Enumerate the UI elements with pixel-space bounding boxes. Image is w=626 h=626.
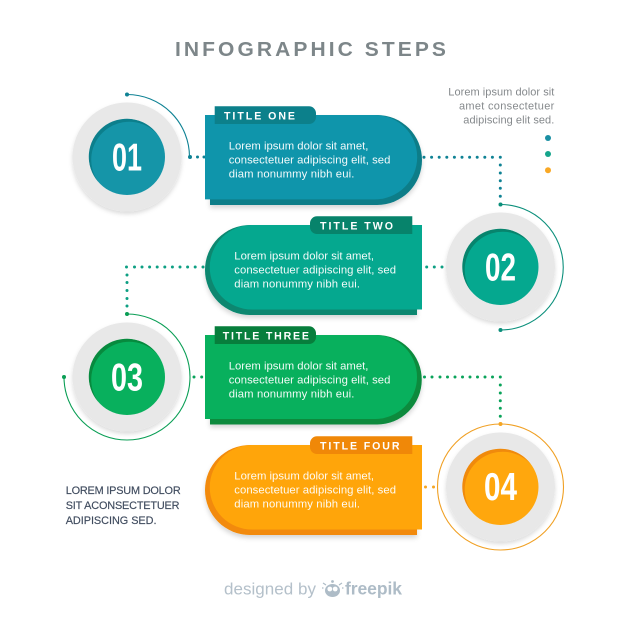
legend dots: [545, 135, 551, 173]
arc 1: [125, 92, 190, 157]
title tab two: [310, 216, 412, 234]
text block: bottom left note: [66, 485, 181, 527]
title tab one: [215, 106, 316, 124]
body text one: consectetuer adipiscing elit, sed: [229, 155, 390, 167]
circle badge 01: [72, 102, 182, 212]
circle badge 04: 04: [484, 466, 517, 509]
title tab four: [310, 436, 412, 454]
panel: title two: [205, 216, 422, 315]
arc 4: [438, 422, 564, 550]
arc 2: [498, 202, 563, 332]
body text four: Lorem ipsum dolor sit amet,: [234, 471, 374, 483]
body text two: consectetuer adipiscing elit, sed: [234, 265, 396, 277]
text block: bottom left note: ADIPISCING SED.: [66, 515, 156, 527]
freepik credit: designed by: [224, 580, 316, 598]
step 1: [72, 92, 422, 212]
text block: top right note: [448, 86, 555, 126]
title tab three: TITLE THREE: [223, 330, 309, 342]
body text one: [229, 141, 390, 181]
body text one: diam nonummy nibh eui.: [229, 169, 354, 181]
body text two: diam nonummy nibh eui.: [234, 279, 360, 291]
text block: top right note: Lorem ipsum dolor sit: [448, 86, 554, 98]
text block: bottom left note: LOREM IPSUM DOLOR: [66, 485, 181, 497]
connector: step 2 to step 3: [125, 266, 444, 308]
text block: top right note: adipiscing elit sed.: [463, 114, 554, 126]
circle badge 03: [72, 322, 182, 432]
body text three: diam nonummy nibh eui.: [229, 389, 354, 401]
title tab three: [215, 326, 316, 344]
body text three: consectetuer adipiscing elit, sed: [229, 375, 390, 387]
freepik credit: freepik: [345, 578, 402, 598]
title tab one: TITLE ONE: [224, 110, 295, 122]
body text three: Lorem ipsum dolor sit amet,: [229, 361, 368, 373]
body text two: Lorem ipsum dolor sit amet,: [234, 251, 374, 263]
arc 3: [62, 312, 190, 440]
body text two: [234, 251, 396, 291]
text block: top right note: amet consectetuer: [459, 100, 555, 112]
connector: step 3 to step 4: [192, 376, 502, 418]
step 3: [62, 312, 422, 440]
body text four: [234, 471, 396, 511]
circle badge 02: 02: [485, 246, 516, 289]
circle badge 02: [446, 212, 555, 322]
body text three: [229, 361, 390, 401]
title: INFOGRAPHIC STEPS: [175, 38, 449, 61]
body text four: consectetuer adipiscing elit, sed: [234, 485, 396, 497]
panel: title four: [205, 436, 422, 535]
body text four: diam nonummy nibh eui.: [234, 499, 360, 511]
freepik credit: [224, 578, 402, 598]
text block: bottom left note: SIT ACONSECTETUER: [66, 500, 180, 512]
body text one: Lorem ipsum dolor sit amet,: [229, 141, 368, 153]
step 4: [205, 422, 564, 550]
circle badge 04: [446, 432, 555, 542]
circle badge 03: 03: [111, 356, 143, 399]
title tab two: TITLE TWO: [320, 220, 393, 232]
step 2: [205, 202, 563, 332]
panel: title three: [205, 326, 422, 424]
title tab four: TITLE FOUR: [320, 440, 400, 452]
connector: step 4: [424, 486, 435, 488]
connector: step 1 to step 2: [188, 155, 502, 198]
circle badge 01: 01: [112, 136, 142, 179]
icon: freepik mascot: [322, 580, 344, 597]
panel: title one: [205, 106, 422, 205]
